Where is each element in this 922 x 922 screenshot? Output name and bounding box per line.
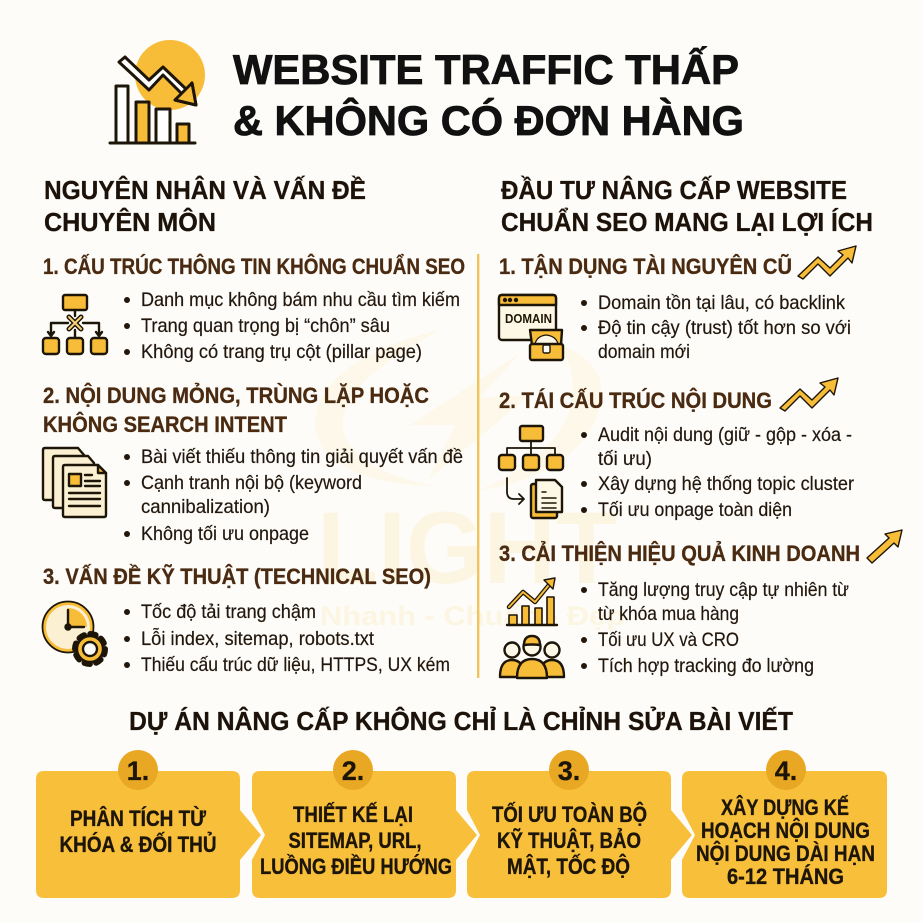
section 3 heading: 3. CẢI THIỆN HIỆU QUẢ KINH DOANH <box>499 541 860 566</box>
section 3 heading: 3. VẤN ĐỀ KỸ THUẬT (TECHNICAL SEO) <box>43 564 431 589</box>
panel: causes <box>42 254 465 676</box>
bullet list 1: Không có trang trụ cột (pillar page) <box>141 341 422 363</box>
step 4 card <box>682 750 887 898</box>
icon: site structure and document <box>499 426 563 518</box>
icon: domain and treasure chest <box>499 295 563 360</box>
step 2 card: LUỒNG ĐIỀU HƯỚNG <box>260 854 452 879</box>
step 3 card: MẬT, TỐC ĐỘ <box>507 853 630 879</box>
bullet list 3: Tối ưu UX và CRO <box>598 629 739 651</box>
bullet list 3: Tốc độ tải trang chậm <box>141 601 316 623</box>
bullet list 3: Tích hợp tracking đo lường <box>598 655 814 677</box>
step 4 card: NỘI DUNG DÀI HẠN <box>696 841 875 866</box>
icon: falling traffic chart <box>110 40 205 143</box>
bullet list 1: Domain tồn tại lâu, có backlink <box>598 292 845 314</box>
icon: trend arrow 1 <box>798 246 856 279</box>
bullet list 1: Danh mục không bám nhu cầu tìm kiếm <box>141 289 460 311</box>
title: WEBSITE TRAFFIC THẤP <box>233 46 739 93</box>
watermark logo <box>315 330 625 631</box>
bullet list 2: Cạnh tranh nội bộ (keyword <box>141 472 362 494</box>
bullet list 2: Không tối ưu onpage <box>141 523 309 545</box>
step 2 card: 2. <box>342 756 364 786</box>
bullet list 2: Tối ưu onpage toàn diện <box>598 499 792 521</box>
step 3 card: TỐI ƯU TOÀN BỘ <box>492 801 647 827</box>
step 2 card: SITEMAP, URL, <box>288 828 422 853</box>
section 2 heading: KHÔNG SEARCH INTENT <box>43 412 288 437</box>
bullet list 2: cannibalization) <box>141 496 270 518</box>
icon: broken hierarchy <box>43 295 107 354</box>
step 1 card: KHÓA & ĐỐI THỦ <box>60 831 216 857</box>
step 4 card: 4. <box>775 756 797 786</box>
section 2 heading: 2. TÁI CẤU TRÚC NỘI DUNG <box>499 388 772 413</box>
bullet list 3 <box>124 601 450 676</box>
heading: benefits: ĐẦU TƯ NÂNG CẤP WEBSITE <box>501 175 847 205</box>
icon: trend arrow 2 <box>780 378 838 411</box>
section 1 heading: 1. TẬN DỤNG TÀI NGUYÊN CŨ <box>499 254 792 279</box>
bullet list 3: Tăng lượng truy cập tự nhiên từ <box>598 579 849 601</box>
bullet list 1: Độ tin cậy (trust) tốt hơn so với <box>598 317 851 339</box>
step 1 card: PHÂN TÍCH TỪ <box>70 806 207 831</box>
bullet list 2: Bài viết thiếu thông tin giải quyết vấn đề <box>141 446 463 468</box>
step 2 card: THIẾT KẾ LẠI <box>293 802 413 827</box>
bullet list 3: từ khóa mua hàng <box>598 603 739 625</box>
bullet list 3: Thiếu cấu trúc dữ liệu, HTTPS, UX kém <box>141 654 450 676</box>
bullet list 1 <box>124 289 460 363</box>
bullet list 1: domain mới <box>598 341 690 363</box>
section 2 heading: 2. NỘI DUNG MỎNG, TRÙNG LẶP HOẶC <box>43 383 429 408</box>
bullet list 3: Lỗi index, sitemap, robots.txt <box>141 627 375 650</box>
heading: causes <box>44 175 366 237</box>
bullet list 2: tối ưu) <box>598 448 652 470</box>
bullet list 2: Xây dựng hệ thống topic cluster <box>598 473 854 495</box>
icon: customers <box>500 636 564 678</box>
bullet list 1 <box>581 292 851 363</box>
icon: trend arrow 3 <box>867 530 902 563</box>
step 4 card: 6-12 THÁNG <box>727 864 844 889</box>
bullet list 2 <box>581 424 854 521</box>
section 1 heading: 1. CẤU TRÚC THÔNG TIN KHÔNG CHUẨN SEO <box>43 254 465 279</box>
bullet list 3 <box>581 579 849 677</box>
title: & KHÔNG CÓ ĐƠN HÀNG <box>233 96 744 144</box>
step 1 card: 1. <box>127 756 149 786</box>
heading: benefits: CHUẨN SEO MANG LẠI LỢI ÍCH <box>501 207 873 237</box>
panel: benefits <box>499 246 902 678</box>
icon: duplicate documents <box>43 448 106 517</box>
icon: domain and treasure chest: DOMAIN <box>505 312 552 326</box>
bullet list 1: Trang quan trọng bị “chôn” sâu <box>141 315 390 337</box>
bullet list 2: Audit nội dung (giữ - gộp - xóa - <box>598 424 852 446</box>
step 1 card <box>36 750 261 898</box>
step 4 card: HOẠCH NỘI DUNG <box>701 818 870 843</box>
heading: causes: NGUYÊN NHÂN VÀ VẤN ĐỀ <box>44 175 366 205</box>
icon: clock and gear <box>42 602 105 664</box>
step 3 card: KỸ THUẬT, BẢO <box>497 828 641 853</box>
step 4 card: XÂY DỰNG KẾ <box>721 795 849 820</box>
bullet list 2 <box>124 446 463 545</box>
title <box>233 46 744 144</box>
watermark logo: Nhanh - Chuẩn - Đẹp <box>320 601 625 631</box>
step 3 card <box>467 750 692 898</box>
step 2 card <box>252 750 477 898</box>
heading: benefits <box>501 175 873 237</box>
icon: growth chart <box>507 578 557 625</box>
section 2 heading <box>43 383 429 437</box>
heading: upgrade project: DỰ ÁN NÂNG CẤP KHÔNG CHỈ LÀ CHỈNH SỬA BÀI VIẾT <box>129 705 793 736</box>
watermark logo: LIGHT <box>317 491 617 605</box>
heading: causes: CHUYÊN MÔN <box>44 207 216 237</box>
step 3 card: 3. <box>558 756 580 786</box>
